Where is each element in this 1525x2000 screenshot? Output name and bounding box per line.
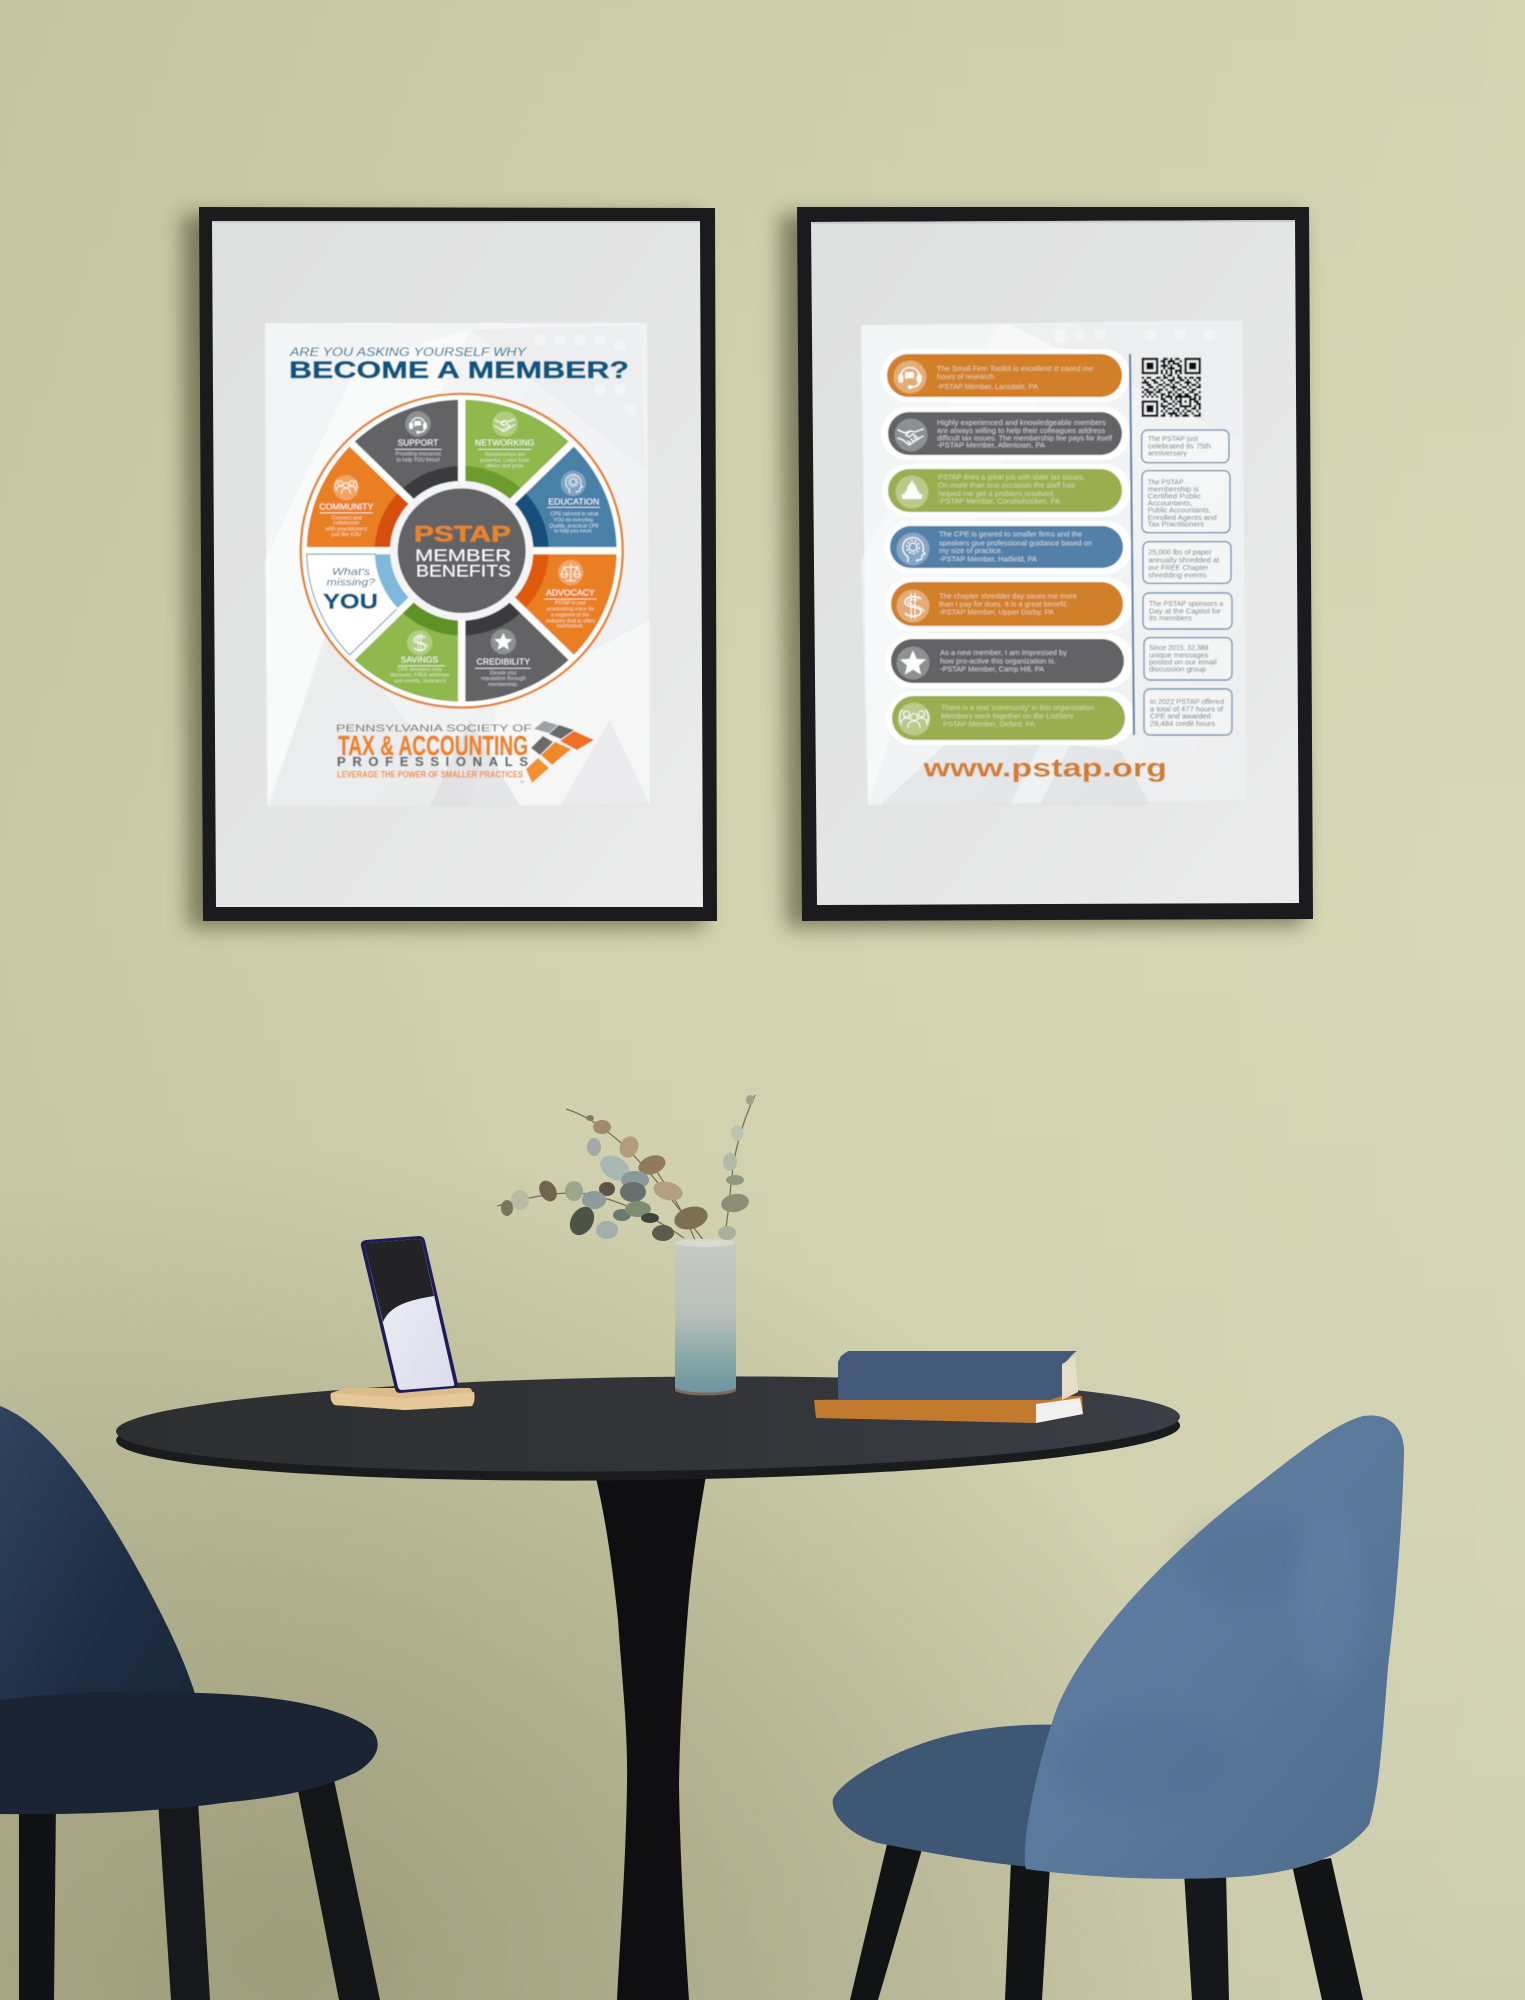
vase	[675, 1239, 736, 1396]
fact box: membership: Enrolled Agents and	[1148, 513, 1217, 522]
segment: education	[547, 471, 600, 535]
poster heading: ARE YOU ASKING YOURSELF WHY	[289, 345, 527, 359]
table top	[115, 1370, 1181, 1487]
testimonial pill: CPE geared to smaller firms: -PSTAP Member, Hatfield, PA	[939, 555, 1037, 564]
fact box: membership: The PSTAP	[1148, 477, 1184, 486]
segment: savings	[390, 630, 450, 684]
testimonial pill: experienced members	[881, 407, 1130, 460]
poster frame: right	[797, 207, 1313, 921]
testimonial pill: shredder day: The chapter shredder day saves me more	[939, 591, 1077, 600]
wedge: credibility	[462, 551, 571, 702]
logo: Pennsylvania Society of Tax & Accounting Professionals: SM	[520, 780, 525, 784]
segment: advocacy: ADVOCACY	[546, 589, 595, 598]
segment: support: SUPPORT	[398, 439, 438, 448]
poster background facets	[265, 325, 650, 806]
fact box: CPE hours: a total of 477 hours of	[1150, 704, 1224, 713]
testimonial pill: real community: There is a real 'community' in this organization.	[941, 703, 1096, 712]
inner bands	[375, 466, 549, 635]
testimonial pill: small firm toolkit: hours of research.	[937, 372, 996, 381]
logo mark tiles	[526, 721, 594, 783]
segment: networking: others and grow.	[486, 464, 524, 470]
segment: community: COMMUNITY	[319, 503, 374, 512]
fact box: paper shredded: our FREE Chapter	[1148, 563, 1209, 572]
segment: credibility: CREDIBILITY	[477, 658, 531, 667]
testimonial pill: new member: As a new member, I am impressed by	[940, 648, 1067, 657]
testimonial pill: experienced members: -PSTAP Member, Allentown, PA	[937, 440, 1045, 449]
testimonial pill: small firm toolkit: -PSTAP Member, Lansdale, PA	[937, 382, 1038, 391]
fact box: day at the capitol: its members	[1149, 614, 1192, 623]
segment: community	[319, 475, 374, 538]
center title: MEMBER	[415, 547, 511, 565]
segment: advocacy: overlooked.	[557, 624, 583, 630]
segment: what's missing	[323, 566, 378, 613]
logo: Pennsylvania Society of Tax & Accounting Professionals: PENNSYLVANIA SOCIETY OF	[336, 722, 532, 734]
segment: education: CPE tailored to what	[551, 512, 599, 518]
testimonial pill: CPE geared to smaller firms: my size of practice.	[939, 546, 1003, 555]
testimonial pill: experienced members: Highly experienced and knowledgeable members	[937, 418, 1106, 427]
segment: networking: powerful. Learn from	[480, 458, 529, 464]
QR code	[1142, 359, 1201, 416]
poster heading	[289, 345, 629, 384]
segment: savings: and events, insurance	[394, 678, 446, 684]
testimonial pill: new member: -PSTAP Member, Camp Hill, PA	[940, 665, 1044, 674]
segment: credibility: membership.	[488, 682, 518, 688]
wedge: community	[307, 444, 462, 551]
center title: PSTAP	[414, 522, 511, 547]
fact box: membership: membership is	[1148, 485, 1199, 494]
poster background facets	[861, 322, 1240, 805]
segment: savings: SAVINGS	[401, 655, 438, 664]
testimonial pill: state tax issues: PSTAP does a great job with state tax issues.	[938, 472, 1085, 481]
fact box: CPE hours	[1144, 689, 1232, 735]
fact box: membership: Public Accountants,	[1148, 506, 1211, 515]
segment: community: just like YOU	[331, 532, 361, 538]
testimonial pill: CPE geared to smaller firms	[884, 521, 1132, 574]
segment: savings: CPE Members only	[398, 667, 442, 673]
segment: support	[395, 411, 442, 464]
fact box: paper shredded: annually shredded at	[1148, 555, 1219, 564]
poster: testimonials and facts	[861, 321, 1246, 805]
segment: community: collaborate	[333, 521, 360, 527]
testimonial pill: new member	[885, 634, 1134, 688]
segment: education: Quality, practical CPE	[549, 523, 600, 529]
segment: education: to help you excel.	[554, 529, 593, 535]
segment: education: YOU do everyday.	[553, 518, 594, 524]
segment: networking: Relationships are	[485, 452, 525, 458]
segment: what's missing: missing?	[327, 577, 375, 589]
table	[115, 1370, 1181, 2000]
chair: left	[0, 1406, 380, 2000]
testimonial pill: new member: how pro-active this organization is.	[940, 656, 1056, 665]
segment: credibility: reputation through	[481, 676, 526, 682]
fact box: 75th anniversary: The PSTAP just	[1148, 434, 1198, 443]
logo: Pennsylvania Society of Tax & Accounting Professionals	[336, 721, 594, 784]
chair legs left	[19, 1800, 56, 2000]
testimonial pill: shredder day: than I pay for dues. It is a great benefit.	[939, 600, 1068, 609]
logo: Pennsylvania Society of Tax & Accounting Professionals: TAX & ACCOUNTING	[338, 730, 528, 761]
fact box: membership: Tax Practitioners	[1148, 520, 1204, 529]
fact box: 75th anniversary	[1142, 430, 1229, 463]
chair back right	[1025, 1415, 1404, 1879]
wedge: savings	[352, 551, 462, 702]
phone on wooden stand	[331, 1236, 475, 1410]
fact box: paper shredded	[1143, 542, 1231, 583]
chair: right	[833, 1415, 1404, 2000]
table pedestal	[594, 1470, 707, 2000]
testimonial pill: state tax issues: helped me get a problem resolved.	[938, 489, 1055, 498]
fact box: discussion messages: discussion group	[1149, 665, 1206, 674]
website URL: www.pstap.org	[922, 752, 1167, 782]
testimonial pill: real community	[886, 691, 1135, 745]
testimonial pill: small firm toolkit: The Small Firm Toolkit is excellent! It saved me	[937, 364, 1093, 373]
testimonial pill: state tax issues	[882, 464, 1131, 517]
chair legs right	[850, 1840, 923, 2000]
segment: networking	[475, 411, 534, 470]
segment: advocacy: industry that is often	[547, 618, 595, 624]
segment: community: Connect and	[332, 515, 362, 521]
fact box: discussion messages: posted on our email	[1149, 657, 1217, 666]
testimonial pill: state tax issues: -PSTAP Member, Conshohocken, PA	[938, 496, 1060, 505]
center title: BENEFITS	[416, 563, 511, 581]
testimonial pill: CPE geared to smaller firms: The CPE is geared to smaller firms and the	[939, 530, 1082, 539]
center title	[414, 522, 511, 581]
plant with eucalyptus branches	[497, 1095, 755, 1241]
segment: support: to help YOU thrive!	[397, 458, 440, 464]
fact box: day at the capitol: Day at the Capitol for	[1149, 606, 1221, 615]
poster: become a member	[265, 323, 650, 806]
segment: advocacy	[544, 560, 597, 630]
poster heading: BECOME A MEMBER?	[289, 357, 629, 384]
fact box: 75th anniversary: anniversary	[1148, 449, 1187, 458]
segment: community: with practitioners	[326, 526, 368, 532]
blue book	[838, 1351, 1077, 1400]
chair back left	[0, 1406, 197, 1760]
segment: networking: NETWORKING	[475, 439, 534, 448]
fact box: CPE hours: 29,484 credit hours	[1150, 719, 1215, 728]
logo: Pennsylvania Society of Tax & Accounting Professionals: LEVERAGE THE POWER OF SMALLER PRACTICES	[337, 770, 523, 780]
logo: Pennsylvania Society of Tax & Accounting Professionals: PROFESSIONALS	[337, 754, 528, 769]
testimonial pill: experienced members: difficult tax issues. The membership fee pays for itself	[937, 433, 1113, 442]
poster frame: left	[199, 207, 717, 921]
missing wedge outline	[307, 554, 397, 655]
frame shadows	[182, 214, 1304, 928]
velvet shading	[1050, 1510, 1365, 1810]
fact box: discussion messages: Since 2015, 32,388	[1149, 643, 1208, 652]
segment: advocacy: unwavering voice for	[547, 607, 595, 613]
fact box: discussion messages	[1144, 638, 1232, 680]
segment: credibility: Elevate your	[490, 670, 517, 676]
segment: education: EDUCATION	[548, 497, 600, 506]
fact box: day at the capitol	[1143, 593, 1232, 629]
wooden stand	[331, 1388, 474, 1410]
testimonial pill: real community: Members work together on the ListServ.	[941, 711, 1075, 720]
stacked books	[814, 1351, 1083, 1423]
fact box: 75th anniversary: celebrated its 75th	[1148, 441, 1211, 450]
segment: what's missing: YOU	[323, 590, 378, 613]
fact box: CPE hours: In 2022 PSTAP offered	[1150, 697, 1224, 706]
segment: savings: discounts, FREE webinars	[390, 673, 450, 679]
testimonial pill: state tax issues: On more than one occasion the staff has	[938, 481, 1075, 490]
segment: credibility	[475, 629, 531, 688]
fact box: day at the capitol: The PSTAP sponsors a	[1149, 599, 1224, 608]
fact box: CPE hours: CPE and awarded	[1150, 712, 1211, 721]
fact box: membership: Certified Public	[1148, 492, 1201, 501]
wedge: education	[462, 444, 617, 551]
fact box: paper shredded: 25,000 lbs of paper	[1148, 547, 1212, 556]
chair seat right	[833, 1725, 1060, 1868]
wedge: advocacy	[462, 551, 617, 657]
fact box: discussion messages: unique messages	[1149, 650, 1209, 659]
segment: support: Providing resources	[396, 452, 442, 458]
wedge: networking	[462, 400, 571, 551]
testimonial pill: CPE geared to smaller firms: speakers give professional guidance based on	[939, 539, 1092, 548]
testimonial pill: shredder day	[885, 577, 1133, 631]
vertical divider	[1130, 354, 1134, 735]
benefits wheel	[301, 394, 623, 708]
wedge: support	[352, 400, 462, 551]
chair seat left	[0, 1692, 378, 1814]
testimonial pill: shredder day: -PSTAP Member, Upper Darby, PA	[939, 607, 1054, 616]
orange book	[814, 1396, 1083, 1423]
segment: advocacy: a segment of the	[551, 613, 590, 619]
fact box: membership: Accountants,	[1148, 499, 1192, 508]
testimonial pill: experienced members: are always willing to help their colleagues address	[937, 426, 1105, 435]
fact box: paper shredded: shredding events	[1148, 570, 1207, 579]
testimonial pill: small firm toolkit	[881, 349, 1130, 402]
fact box: membership	[1142, 471, 1230, 533]
segment: what's missing: What's	[332, 566, 371, 578]
testimonial pill: real community: PSTAP Member, Oxford, PA	[943, 720, 1035, 729]
segment: advocacy: PSTAP is your	[555, 601, 586, 607]
